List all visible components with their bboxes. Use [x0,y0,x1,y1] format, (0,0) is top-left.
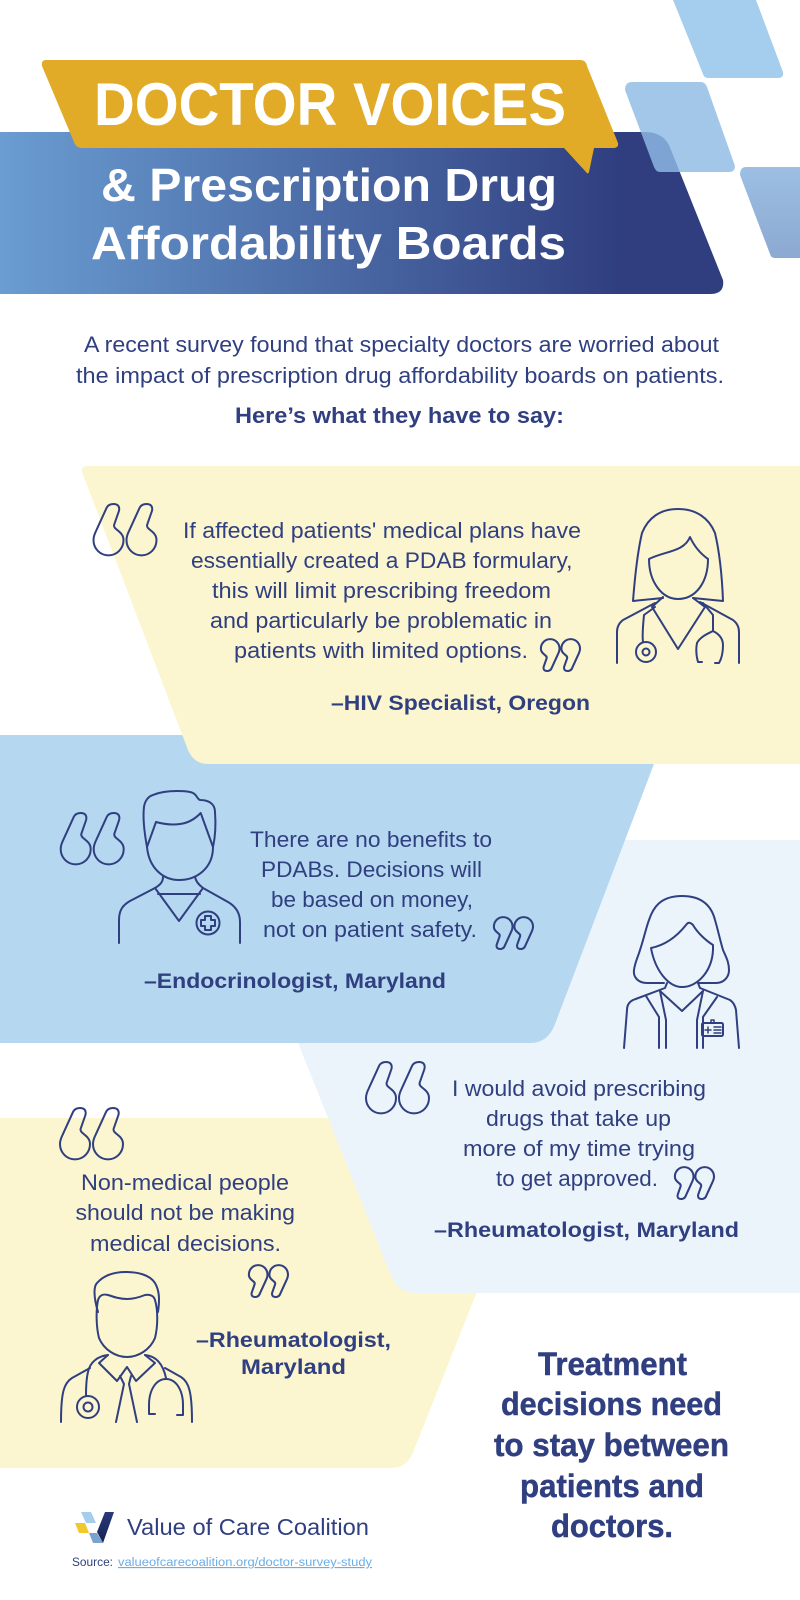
closing statement: decisions need [501,1386,722,1422]
closing statement: to stay between [494,1427,729,1463]
open quote mark [61,813,124,864]
close quote mark [541,639,580,671]
logo wordmark: Value of Care Coalition [127,1514,369,1540]
panel background [82,466,800,764]
panel: rheumatologist quote (pale blue) [217,840,800,1293]
decorative parallelogram top [673,0,783,78]
title: doctor voices: DOCTOR VOICES [94,71,566,138]
quote text: PDABs. Decisions will [261,857,482,882]
quote text: There are no benefits to [250,827,492,852]
panel background [0,1118,546,1468]
quote text: medical decisions. [90,1231,281,1256]
quote text: I would avoid prescribing [452,1076,706,1101]
decorative parallelogram right [740,167,800,258]
attribution: –Rheumatologist, Maryland [434,1218,739,1242]
attribution: –HIV Specialist, Oregon [331,691,590,715]
open quote mark [366,1062,429,1113]
quote text: should not be making [76,1200,295,1225]
header banner [0,0,800,294]
closing statement: patients and [520,1468,704,1504]
icon: male doctor in scrubs [119,791,240,943]
quote text: Non-medical people [81,1170,289,1195]
quote text [76,1170,295,1256]
icon: female doctor with stethoscope [617,509,739,663]
quote text: drugs that take up [486,1106,671,1131]
logo mark [75,1512,114,1543]
panel background [217,840,800,1293]
intro text: Here’s what they have to say: [235,403,564,428]
subtitle line 2: Affordability Boards [91,217,566,269]
quote text: patients with limited options. [234,638,528,663]
logo: value of care coalition [75,1512,369,1543]
panel background [0,735,665,1043]
attribution: –Rheumatologist, [196,1328,391,1352]
source line: valueofcarecoalition.org/doctor-survey-study [118,1557,372,1569]
closing statement [494,1346,729,1544]
close quote mark [494,917,533,949]
attribution: Maryland [241,1355,346,1379]
quote text: be based on money, [271,887,473,912]
panel: rheumatologist quote (yellow lower) [0,1108,546,1468]
open quote mark [94,504,156,555]
quote text [452,1076,706,1191]
close quote mark [675,1167,714,1199]
intro text: the impact of prescription drug affordability boards on patients. [76,363,724,388]
quote text: this will limit prescribing freedom [212,578,551,603]
quote text: and particularly be problematic in [210,608,552,633]
quote text: If affected patients' medical plans have [183,518,581,543]
intro text: A recent survey found that specialty doctors are worried about [84,332,719,357]
subtitle line 1: & Prescription Drug [101,159,557,211]
icon: male doctor with stethoscope [61,1272,192,1422]
quote text: not on patient safety. [263,917,477,942]
gold title ribbon [42,60,618,174]
source line: Source: [72,1557,113,1569]
intro text [76,332,724,428]
panel: HIV specialist quote (yellow upper) [82,466,800,764]
closing statement: doctors. [551,1508,673,1544]
attribution [196,1328,391,1379]
quote text: to get approved. [496,1166,658,1191]
navy gradient banner [0,132,723,294]
close quote mark [249,1265,288,1297]
quote text [250,827,492,942]
decorative parallelogram middle [625,82,735,172]
quote text: more of my time trying [463,1136,695,1161]
open quote mark [60,1108,123,1159]
quote text [183,518,581,663]
closing statement: Treatment [538,1346,687,1382]
attribution: –Endocrinologist, Maryland [144,969,446,993]
quote text: essentially created a PDAB formulary, [191,548,572,573]
panel: endocrinologist quote (blue) [0,735,665,1043]
icon: female doctor with badge [624,896,739,1048]
